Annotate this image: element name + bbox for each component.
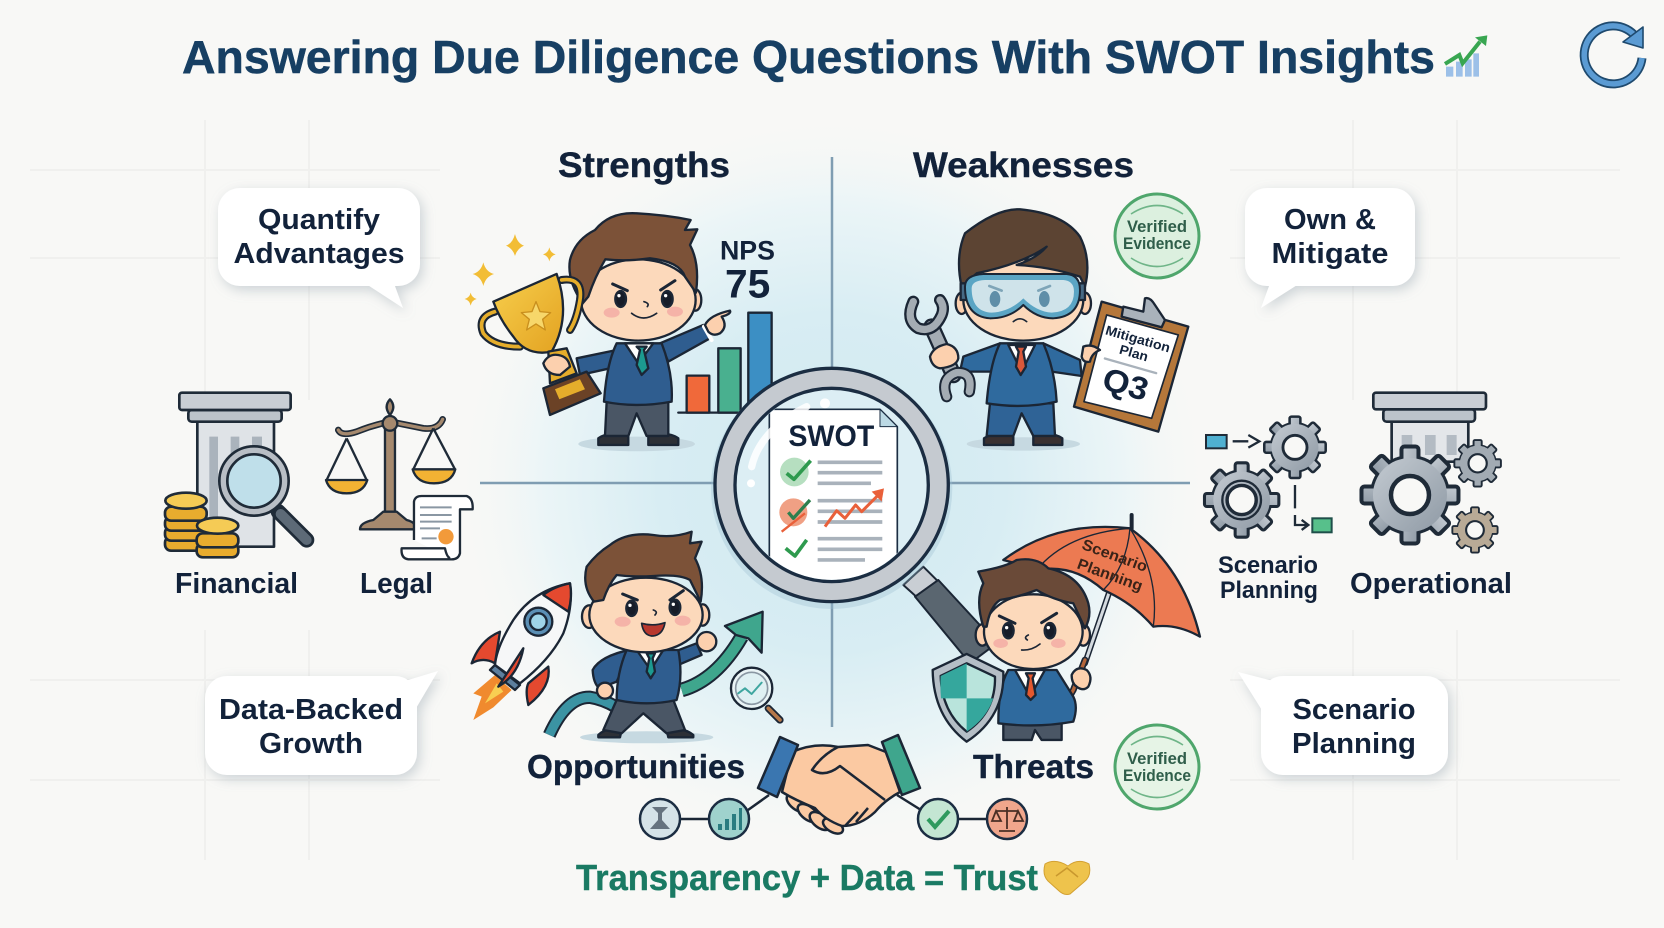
SWOT label: SWOT [788, 420, 874, 453]
badge: Verified Evidence bottom: Verified [1127, 749, 1187, 768]
callout: Scenario Planning: Planning [1292, 728, 1416, 760]
head [582, 532, 709, 652]
umbrella: Scenario [1080, 536, 1150, 576]
magnifying glass over SWOT document [711, 368, 952, 609]
head [976, 559, 1090, 669]
icon: scales process circle [987, 799, 1027, 839]
small magnifier [731, 668, 780, 720]
heading: Weaknesses: Weaknesses [913, 146, 1134, 185]
NPS value [720, 235, 775, 307]
icon: gold handshake emoji [1044, 861, 1090, 894]
wrench [910, 300, 970, 397]
icon: refresh arrow [1584, 26, 1643, 84]
callout: Own and Mitigate: Own & [1284, 204, 1376, 236]
icon group: Legal scales and scroll [326, 399, 473, 559]
callout: Data-Backed Growth [205, 671, 438, 775]
heading: Threats: Threats [973, 748, 1094, 785]
badge: Verified Evidence top: Verified [1127, 217, 1187, 236]
connector lines to handshake [680, 795, 987, 819]
clipboard: Mitigation [1104, 323, 1172, 355]
callout: Data-Backed Growth: Data-Backed [219, 694, 403, 726]
callout: Own and Mitigate: Mitigate [1272, 238, 1388, 270]
badge: Verified Evidence bottom [1115, 725, 1199, 809]
icon: chart process circle [709, 799, 749, 839]
badge: Verified Evidence bottom: Evidence [1123, 766, 1191, 785]
umbrella [1003, 515, 1200, 700]
label: Operational: Operational [1350, 568, 1512, 600]
label: Financial: Financial [175, 568, 298, 600]
shield [933, 654, 1003, 742]
character: Weaknesses with goggles, wrench, clipboard [910, 209, 1188, 451]
badge: Verified Evidence top [1115, 194, 1199, 278]
character: Opportunities with rocket and growth arrow [472, 532, 780, 743]
callout: Quantify Advantages: Quantify [258, 204, 380, 236]
label: Scenario Planning [1218, 552, 1318, 604]
panel: central blue glow [447, 108, 1217, 858]
chart: NPS bars [678, 313, 772, 413]
icon: check process circle [918, 799, 958, 839]
label: Scenario Planning: Scenario [1218, 552, 1318, 579]
callout: Data-Backed Growth: Growth [259, 728, 363, 760]
magnifier handle [903, 567, 997, 663]
callout: Own and Mitigate [1245, 188, 1415, 308]
head [569, 213, 701, 341]
clipboard: Plan [1118, 342, 1150, 364]
icon group: Operational pillar and gears [1361, 393, 1501, 553]
character: Threats with umbrella and shield [933, 515, 1200, 742]
character: Strengths with trophy and NPS chart [465, 213, 775, 451]
NPS value: NPS [720, 235, 775, 265]
icon group: Financial pillar, coins and magnifier [165, 393, 307, 557]
heading: Opportunities: Opportunities [527, 748, 745, 785]
callout: Quantify Advantages [218, 188, 420, 308]
title: Answering Due Diligence Questions With SWOT Insights [182, 31, 1435, 83]
label: Legal: Legal [360, 568, 433, 600]
icon group: Scenario planning gears and flow [1204, 417, 1332, 537]
NPS value: 75 [725, 263, 770, 307]
icon: handshake [758, 735, 920, 837]
trophy [482, 274, 601, 415]
quadrant divider lines [480, 157, 1190, 727]
head with goggles [956, 209, 1091, 341]
growth arrow [549, 612, 763, 735]
callout: Quantify Advantages: Advantages [234, 238, 404, 270]
icon: document process circle [640, 799, 680, 839]
tagline: Transparency + Data = Trust [576, 857, 1038, 898]
icon: growth chart emoji [1445, 35, 1487, 77]
label: Scenario Planning: Planning [1220, 577, 1318, 604]
callout: Scenario Planning: Scenario [1292, 694, 1416, 726]
clipboard: Q3 [1099, 361, 1153, 408]
badge: Verified Evidence top: Evidence [1123, 234, 1191, 253]
rocket [472, 583, 571, 720]
callout: Scenario Planning [1238, 672, 1448, 775]
clipboard [1074, 298, 1188, 432]
heading: Strengths: Strengths [558, 146, 730, 185]
umbrella: Planning [1075, 556, 1145, 595]
